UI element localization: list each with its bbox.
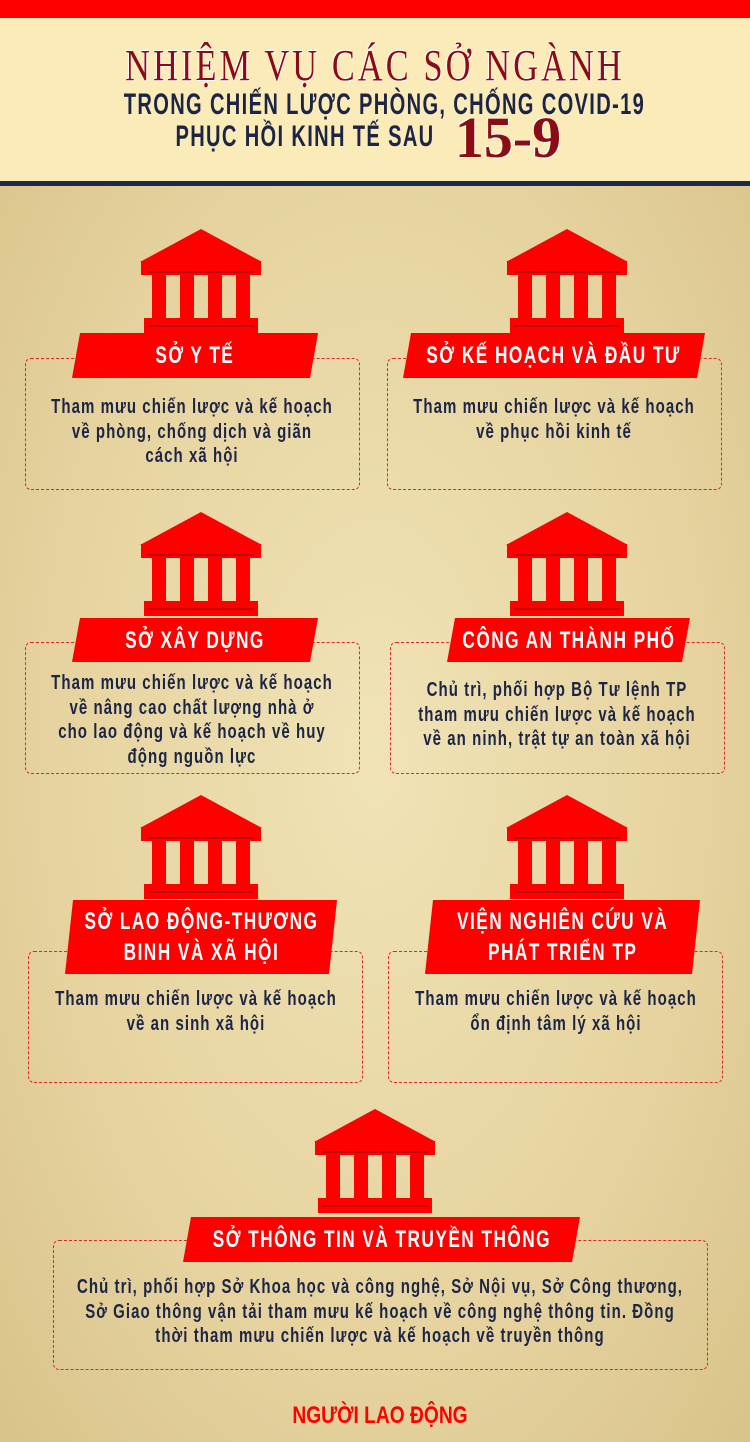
text bbox=[415, 988, 697, 1034]
banner: BINH VÀ XÃ HỘI bbox=[123, 939, 279, 966]
banner bbox=[447, 618, 690, 662]
text: về an sinh xã hội bbox=[127, 1012, 265, 1034]
text: thời tham mưu chiến lược và kế hoạch về truyền thông bbox=[155, 1325, 605, 1347]
text: ổn định tâm lý xã hội bbox=[470, 1012, 642, 1034]
text: Sở Giao thông vận tải tham mưu kế hoạch về công nghệ thông tin. Đồng bbox=[85, 1300, 675, 1322]
panel: Vien nghien cuu bbox=[388, 795, 723, 1083]
text: về nâng cao chất lượng nhà ở bbox=[70, 696, 314, 718]
text: về an ninh, trật tự an toàn xã hội bbox=[423, 728, 691, 750]
text: tham mưu chiến lược và kế hoạch bbox=[418, 704, 696, 726]
text bbox=[77, 1276, 683, 1347]
text bbox=[51, 396, 333, 467]
text: Chủ trì, phối hợp Sở Khoa học và công nghệ, Sở Nội vụ, Sở Công thương, bbox=[77, 1276, 683, 1298]
text: về phòng, chống dịch và giãn bbox=[72, 420, 312, 442]
icon: building bbox=[140, 795, 262, 899]
text: Tham mưu chiến lược và kế hoạch bbox=[51, 396, 333, 418]
panel: Cong an thanh pho bbox=[390, 512, 725, 774]
banner: CÔNG AN THÀNH PHỐ bbox=[462, 626, 675, 654]
text: Tham mưu chiến lược và kế hoạch bbox=[55, 988, 337, 1010]
banner: VIỆN NGHIÊN CỨU VÀ bbox=[457, 908, 668, 935]
panel: So Y te bbox=[25, 229, 360, 490]
text: về phục hồi kinh tế bbox=[476, 420, 632, 442]
icon: building bbox=[506, 512, 628, 616]
text bbox=[413, 396, 695, 442]
text bbox=[51, 672, 333, 768]
banner bbox=[403, 333, 705, 378]
text: Chủ trì, phối hợp Bộ Tư lệnh TP bbox=[427, 679, 687, 701]
banner: PHÁT TRIỂN TP bbox=[488, 939, 637, 966]
icon: building bbox=[314, 1109, 436, 1213]
icon: building bbox=[140, 512, 262, 616]
top red bar bbox=[0, 0, 750, 18]
icon: building bbox=[140, 229, 262, 333]
logo: NGƯỜI LAO ĐỘNG bbox=[292, 1402, 468, 1429]
banner bbox=[425, 900, 700, 974]
panel: So Xay dung bbox=[25, 512, 360, 774]
box bbox=[25, 358, 360, 490]
text: cho lao động và kế hoạch về huy bbox=[58, 721, 326, 743]
text: cách xã hội bbox=[145, 445, 239, 467]
panel: So Thong tin va Truyen thong bbox=[53, 1109, 708, 1370]
banner bbox=[183, 1217, 580, 1262]
text: Tham mưu chiến lược và kế hoạch bbox=[51, 672, 333, 694]
text: Tham mưu chiến lược và kế hoạch bbox=[413, 396, 695, 418]
icon: building bbox=[506, 229, 628, 333]
banner: SỞ LAO ĐỘNG-THƯƠNG bbox=[84, 908, 318, 935]
banner bbox=[65, 900, 337, 974]
title: NHIỆM VỤ CÁC SỞ NGÀNH bbox=[125, 41, 625, 90]
text bbox=[418, 679, 696, 750]
banner: SỞ KẾ HOẠCH VÀ ĐẦU TƯ bbox=[427, 342, 681, 369]
panel: So Ke hoach va Dau tu bbox=[387, 229, 722, 490]
subtitle line 2: PHỤC HỒI KINH TẾ SAU bbox=[175, 120, 435, 153]
header panel bbox=[0, 18, 750, 186]
text bbox=[55, 988, 337, 1034]
big date 15-9: 15-9 bbox=[455, 105, 561, 170]
banner bbox=[72, 618, 318, 662]
banner: SỞ XÂY DỰNG bbox=[125, 626, 265, 654]
text: Tham mưu chiến lược và kế hoạch bbox=[415, 988, 697, 1010]
subtitle: TRONG CHIẾN LƯỢC PHÒNG, CHỐNG COVID-19 bbox=[124, 88, 645, 121]
banner: SỞ Y TẾ bbox=[156, 342, 234, 369]
panel: So Lao dong bbox=[28, 795, 363, 1083]
banner bbox=[72, 333, 318, 378]
text: động nguồn lực bbox=[128, 746, 256, 768]
icon: building bbox=[506, 795, 628, 899]
banner: SỞ THÔNG TIN VÀ TRUYỀN THÔNG bbox=[212, 1226, 551, 1253]
